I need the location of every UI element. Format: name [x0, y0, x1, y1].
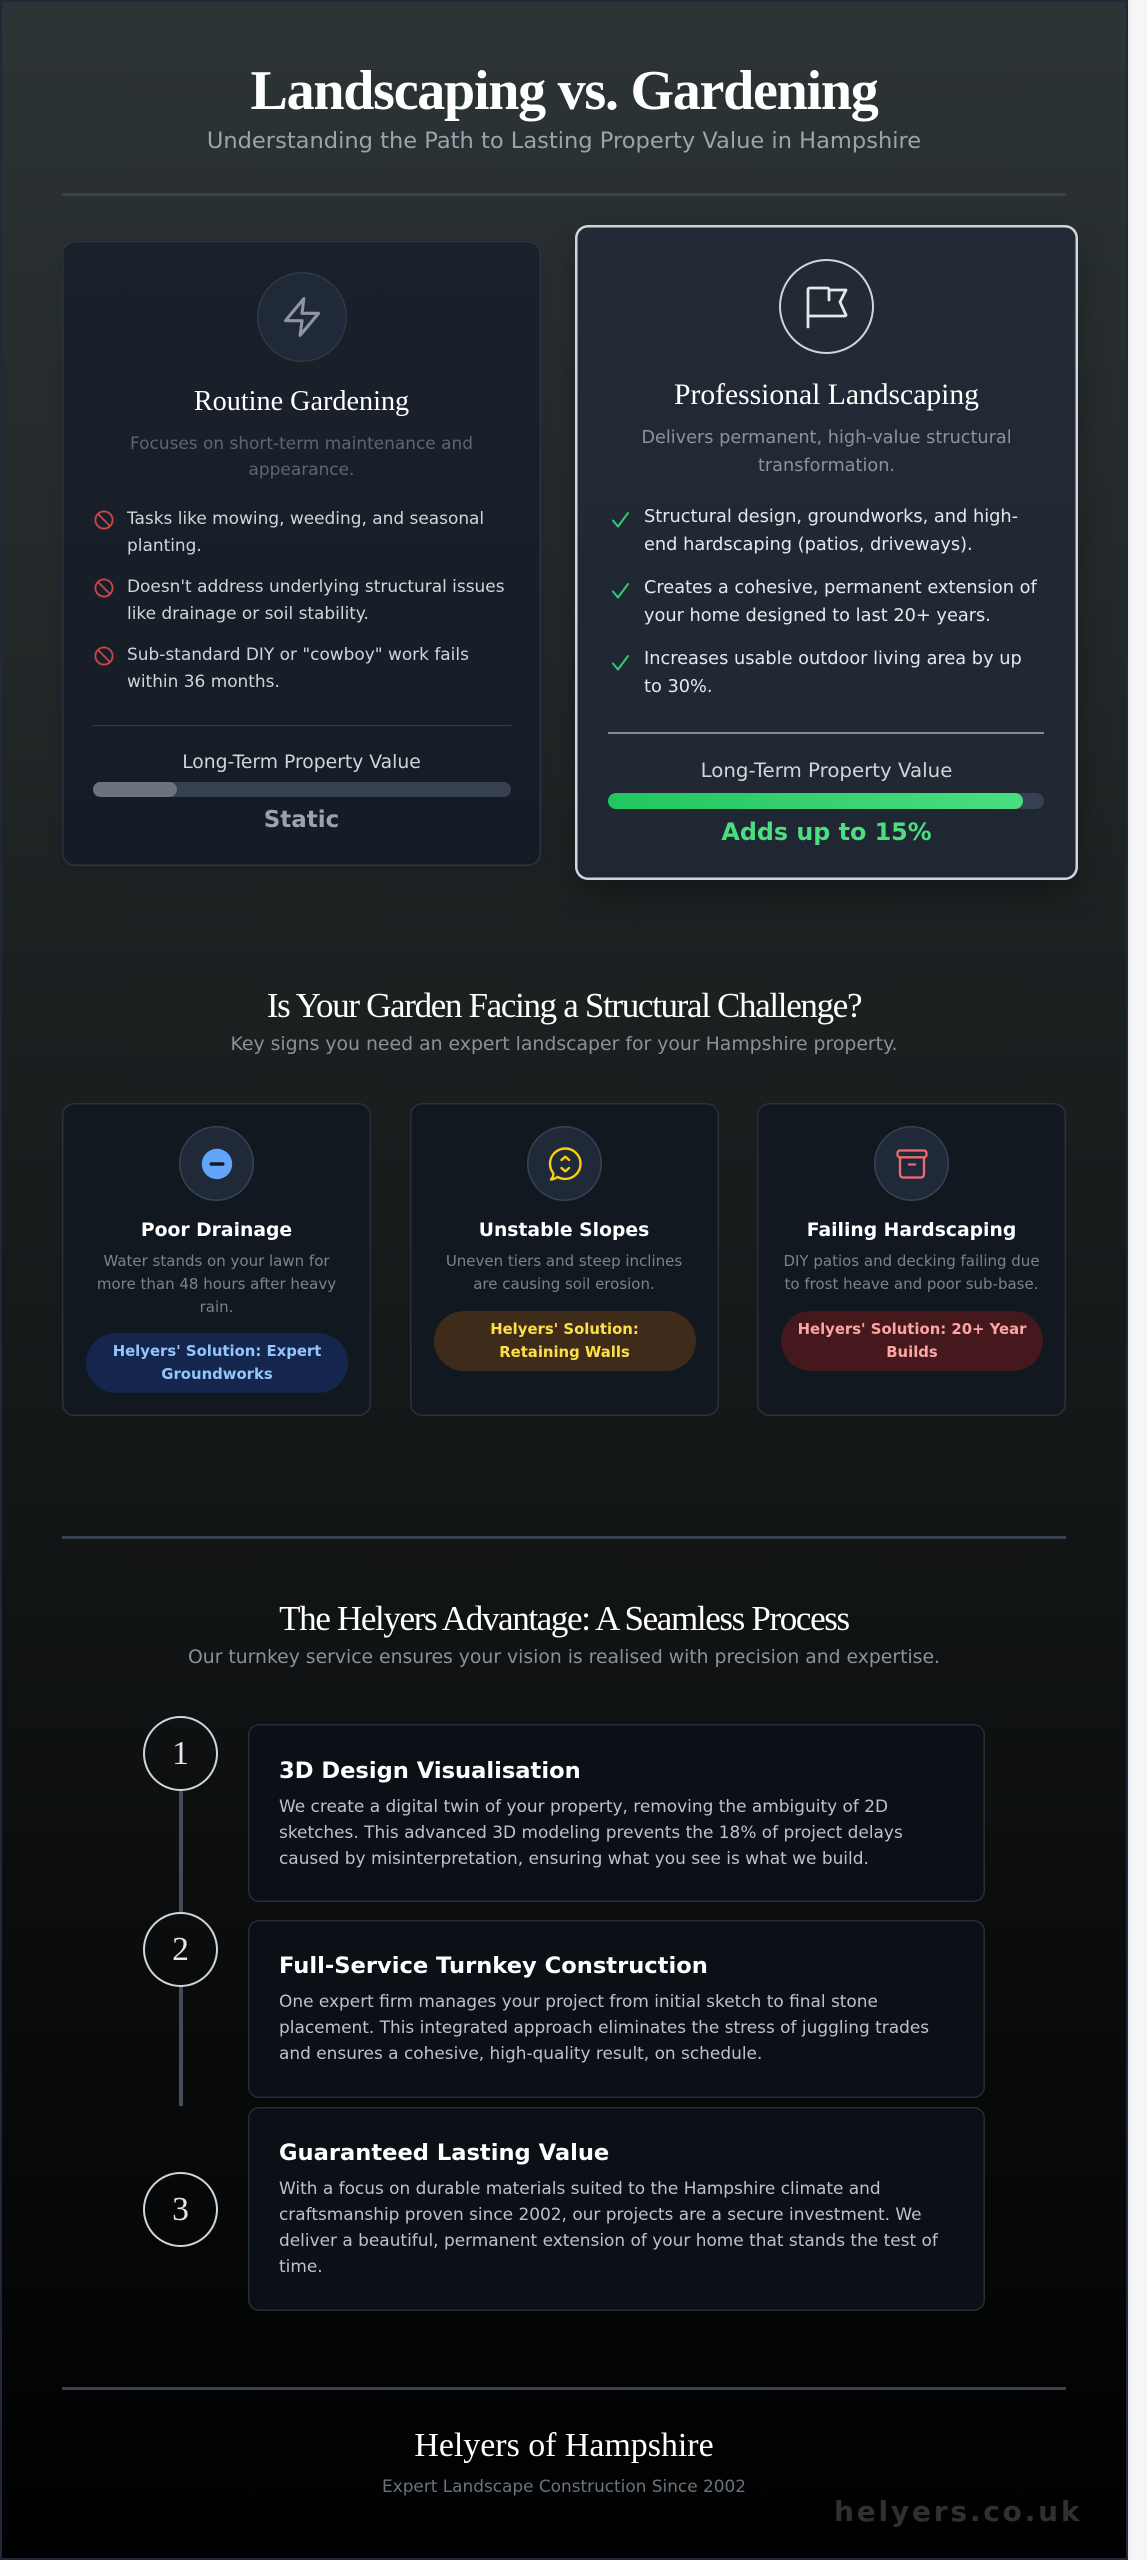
step number 2: 2 [172, 1930, 189, 1968]
panel: step 3 lasting value [248, 2107, 985, 2311]
panel: unstable slopes [410, 1103, 718, 1416]
list item: structural issues: Doesn't address underlying structural issues [127, 576, 505, 596]
panel: professional landscaping [575, 225, 1078, 880]
step number 3: 3 [172, 2190, 189, 2228]
step 1 text: sketches. This advanced 3D modeling prevents the 18% of project delays [279, 1822, 903, 1842]
solution pill: 20+ year builds: Builds [886, 1343, 938, 1361]
step 3 heading: Guaranteed Lasting Value [279, 2140, 609, 2166]
solution pill: retaining walls [434, 1311, 696, 1371]
list item: cowboy work: within 36 months. [127, 671, 280, 691]
list item: mowing [94, 508, 484, 555]
heading: structural challenge: Is Your Garden Facing a Structural Challenge? [267, 986, 861, 1025]
list item: outdoor living: Increases usable outdoor living area by up [644, 649, 1022, 669]
list item: structural issues: like drainage or soil stability. [127, 603, 369, 623]
list item: structural issues [94, 576, 505, 623]
step 1 text: We create a digital twin of your property, removing the ambiguity of 2D [279, 1796, 888, 1816]
description: more than 48 hours after heavy [97, 1275, 336, 1293]
list item: permanent extension [612, 578, 1038, 626]
description: Water stands on your lawn for [103, 1252, 330, 1270]
panel: routine gardening [62, 241, 541, 866]
list item: permanent extension: Creates a cohesive, permanent extension of [644, 578, 1037, 598]
step 1 heading: 3D Design Visualisation [279, 1758, 581, 1784]
footer tagline: Expert Landscape Construction Since 2002 [382, 2476, 746, 2496]
step 3 text [279, 2178, 938, 2276]
list item: structural design [612, 507, 1018, 555]
description [783, 1252, 1040, 1293]
solution pill: 20+ year builds: Helyers' Solution: 20+ Year [798, 1320, 1026, 1338]
step 3 text: With a focus on durable materials suited to the Hampshire climate and [279, 2178, 881, 2198]
list item: outdoor living [612, 649, 1022, 697]
heading: routine gardening: Routine Gardening [194, 386, 409, 417]
heading: helyers advantage: The Helyers Advantage: A Seamless Process [279, 1598, 849, 1638]
heading: unstable slopes: Unstable Slopes [479, 1220, 649, 1241]
step 1 text [279, 1796, 903, 1868]
icon: lightning bolt [257, 272, 347, 362]
heading: failing hardscaping: Failing Hardscaping [807, 1220, 1016, 1241]
value label: Long-Term Property Value [182, 752, 421, 772]
value result: static: Static [264, 807, 339, 833]
panel: poor drainage [62, 1103, 371, 1416]
list item: cowboy work [94, 644, 469, 691]
watermark: website: helyers.co.uk [834, 2495, 1082, 2528]
description: are causing soil erosion. [473, 1275, 655, 1293]
panel: step 2 turnkey construction [248, 1920, 985, 2098]
step number 1 [143, 1716, 218, 1791]
value label: Long-Term Property Value [701, 759, 952, 782]
description: rain. [200, 1298, 233, 1316]
description: appearance. [249, 459, 354, 479]
icon: red archive box [874, 1126, 949, 1201]
step number 1: 1 [172, 1734, 189, 1772]
description: to frost heave and poor sub-base. [785, 1275, 1038, 1293]
timeline connector: step 2 onward [178, 1986, 182, 2106]
heading: professional landscaping: Professional Landscaping [674, 378, 979, 410]
timeline connector: step 1 to 2 [178, 1790, 182, 1912]
description [97, 1252, 336, 1316]
title: Landscaping vs. Gardening [251, 60, 877, 122]
list item: permanent extension: your home designed to last 20+ years. [644, 606, 991, 626]
subtitle: Understanding the Path to Lasting Property Value in Hampshire [207, 128, 921, 154]
step 2 text: and ensures a cohesive, high-quality result, on schedule. [279, 2043, 762, 2063]
step 2 text: placement. This integrated approach eliminates the stress of juggling trades [279, 2017, 929, 2037]
description [130, 433, 473, 479]
footer brand: Helyers of Hampshire [414, 2427, 714, 2464]
step 3 text: deliver a beautiful, permanent extension of your home that stands the test of [279, 2230, 938, 2250]
description: DIY patios and decking failing due [783, 1252, 1040, 1270]
description: Uneven tiers and steep inclines [446, 1252, 682, 1270]
step 1 text: caused by misinterpretation, ensuring what you see is what we build. [279, 1848, 869, 1868]
step number 3 [143, 2172, 218, 2247]
step 3 text: craftsmanship proven since 2002, our projects are a secure investment. We [279, 2204, 922, 2224]
description: Focuses on short-term maintenance and [130, 433, 473, 453]
list item: outdoor living: to 30%. [644, 677, 713, 697]
icon: yellow speech bubble [526, 1126, 602, 1201]
panel: step 1 design visualisation [248, 1724, 985, 1902]
subheading: structural challenge: Key signs you need an expert landscaper for your Hampshire property. [230, 1034, 898, 1054]
solution pill: groundworks: Groundworks [161, 1365, 273, 1383]
list item: structural design: end hardscaping (patios, driveways). [644, 535, 973, 555]
icon: blue minus disc [179, 1126, 254, 1201]
description [446, 1252, 682, 1293]
list item: mowing: planting. [127, 535, 202, 555]
description [641, 428, 1012, 476]
solution pill: groundworks: Helyers' Solution: Expert [113, 1342, 321, 1360]
list item: mowing: Tasks like mowing, weeding, and seasonal [127, 508, 484, 528]
progress bar: static value [93, 782, 511, 797]
value result: adds up to 15%: Adds up to 15% [721, 818, 932, 846]
solution pill: groundworks [86, 1333, 348, 1393]
step number 2 [143, 1912, 218, 1987]
list item: cowboy work: Sub-standard DIY or "cowboy" work fails [127, 644, 469, 664]
step 2 text [279, 1991, 929, 2063]
list item: structural design: Structural design, groundworks, and high- [644, 507, 1018, 527]
subheading: helyers advantage: Our turnkey service ensures your vision is realised with precision and expertise. [188, 1646, 940, 1668]
solution pill: 20+ year builds [781, 1311, 1043, 1371]
solution pill: retaining walls: Retaining Walls [499, 1343, 630, 1361]
solution pill: retaining walls: Helyers' Solution: [490, 1320, 639, 1338]
panel: failing hardscaping [757, 1103, 1066, 1416]
step 2 heading: Full-Service Turnkey Construction [279, 1953, 708, 1979]
progress bar: added value [608, 793, 1044, 809]
description: transformation. [758, 456, 895, 476]
step 3 text: time. [279, 2256, 323, 2276]
icon: flag [779, 259, 874, 354]
step 2 text: One expert firm manages your project from initial sketch to final stone [279, 1991, 878, 2011]
heading: poor drainage: Poor Drainage [141, 1220, 292, 1241]
description: Delivers permanent, high-value structural [641, 428, 1012, 448]
